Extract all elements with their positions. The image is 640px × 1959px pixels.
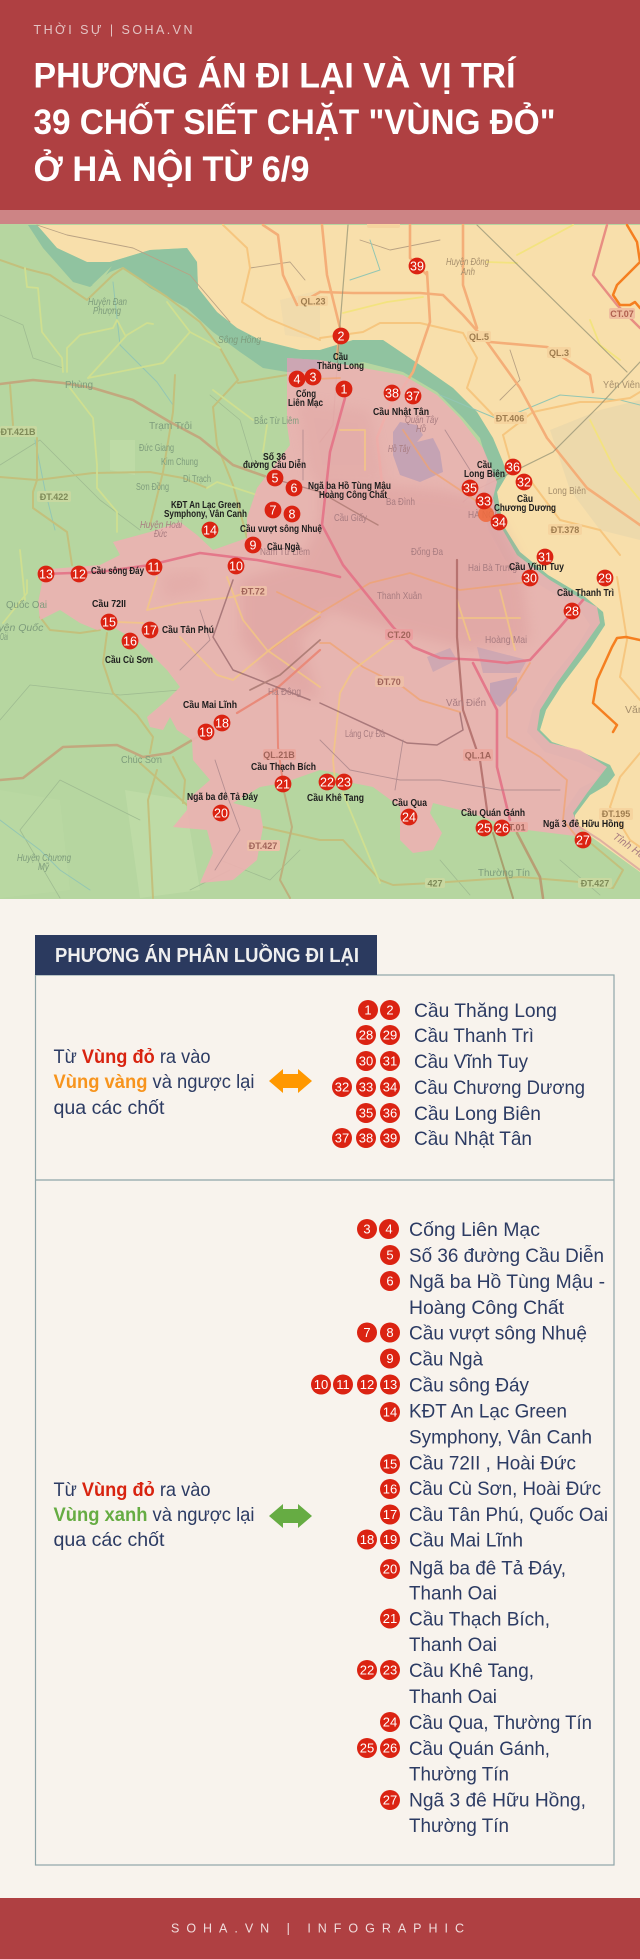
checkpoint name labels: Cống bbox=[296, 388, 316, 400]
row: Cầu Ngà bbox=[380, 1348, 483, 1370]
place names: Đức bbox=[154, 528, 167, 540]
checkpoint markers: 31 bbox=[538, 550, 552, 564]
row: Cầu Long Biên: 35 bbox=[359, 1106, 373, 1120]
row: Cầu Thanh Trì: 29 bbox=[383, 1028, 397, 1042]
checkpoint name labels: Số 36 bbox=[263, 451, 286, 463]
row: Cầu Tân Phú: Cầu Tân Phú, Quốc Oai bbox=[409, 1504, 608, 1526]
row: Cầu Chương Dương: 34 bbox=[383, 1080, 397, 1094]
row: Cầu vượt sông Nhuệ: 7 bbox=[363, 1325, 371, 1340]
row: Cầu sông Đáy: 12 bbox=[360, 1377, 374, 1392]
road number plates: QL.21B bbox=[263, 750, 295, 760]
checkpoint name labels: Cầu Quán Gánh bbox=[461, 807, 525, 819]
yellow zone description: qua các chốt bbox=[54, 1097, 165, 1119]
row: Cầu Thanh Trì: Cầu Thanh Trì bbox=[414, 1025, 534, 1047]
row: Cầu Thanh Trì: 28 bbox=[359, 1028, 373, 1042]
row: Cầu Vĩnh Tuy bbox=[356, 1051, 528, 1073]
row: Cầu Ngà: 9 bbox=[386, 1351, 394, 1366]
row: Ngã ba đê Tả Đáy: 20 bbox=[383, 1562, 397, 1576]
title: 39 CHỐT SIẾT CHẶT "VÙNG ĐỎ" bbox=[34, 102, 556, 142]
checkpoint markers: 35 bbox=[463, 482, 477, 496]
place names: Chúc Sơn bbox=[121, 754, 162, 766]
row: Ngã 3 đê Hữu Hồng: 27 bbox=[383, 1792, 397, 1808]
checkpoint markers: 29 bbox=[598, 572, 612, 586]
yellow zone bbox=[37, 225, 640, 872]
checkpoint markers: 33 bbox=[477, 494, 491, 508]
road number plates: ĐT.378 bbox=[551, 525, 579, 535]
checkpoint markers: 19 bbox=[199, 726, 213, 740]
place names: Ba Đình bbox=[386, 496, 415, 508]
light green roads bbox=[3, 268, 380, 883]
road number plates: ĐT.406 bbox=[496, 414, 524, 424]
row: Cầu Thạch Bích: Cầu Thạch Bích, bbox=[409, 1608, 550, 1630]
place names: Hai Bà Trưng bbox=[468, 562, 517, 574]
place names: Đức Giang bbox=[139, 442, 174, 454]
place names: Hồ bbox=[416, 423, 426, 435]
row: Cầu Thăng Long: 1 bbox=[364, 1002, 372, 1018]
checkpoint markers: 32 bbox=[517, 476, 531, 490]
red zone roads bbox=[270, 378, 577, 837]
row: Cầu Ngà: Cầu Ngà bbox=[409, 1348, 483, 1370]
checkpoint name labels: Cầu Qua bbox=[392, 797, 427, 809]
row: Cầu Vĩnh Tuy: 30 bbox=[359, 1054, 373, 1068]
place names: HÀ NỘI bbox=[468, 508, 497, 521]
checkpoint list: yellow zone bbox=[332, 1000, 585, 1150]
row: Cầu Long Biên bbox=[356, 1103, 541, 1125]
title bbox=[34, 56, 556, 189]
footer: SOHA.VN | INFOGRAPHIC bbox=[171, 1922, 464, 1936]
checkpoint markers: 23 bbox=[337, 776, 351, 790]
row: Cầu Mai Lĩnh: 18 bbox=[360, 1532, 374, 1547]
checkpoint markers: 16 bbox=[123, 634, 137, 648]
road number plates: CT.20 bbox=[387, 630, 411, 640]
row: Cầu sông Đáy bbox=[311, 1374, 529, 1396]
row: Cầu Khê Tang: Cầu Khê Tang, bbox=[409, 1660, 534, 1682]
row: Cầu Khê Tang: Thanh Oai bbox=[409, 1686, 497, 1708]
Red River bbox=[28, 225, 615, 825]
row: Cầu sông Đáy: 11 bbox=[336, 1377, 350, 1392]
road number plates: ĐT.427 bbox=[249, 841, 277, 851]
checkpoint name labels: Cầu bbox=[333, 351, 348, 363]
place names: Thường Tín bbox=[478, 867, 530, 879]
row: Cầu Cù Sơn: 16 bbox=[383, 1482, 397, 1496]
road number plates: QL.23 bbox=[300, 296, 326, 306]
row: Cầu Chương Dương: Cầu Chương Dương bbox=[414, 1077, 585, 1099]
yellow zone secondary roads bbox=[223, 225, 640, 847]
road number plates: ĐT.72 bbox=[241, 586, 265, 596]
river island bbox=[92, 266, 112, 285]
row: Số 36 đường Cầu Diễn: Số 36 đường Cầu Diễn bbox=[409, 1244, 604, 1267]
checkpoint markers: 9 bbox=[250, 538, 257, 552]
row: Ngã ba đê Tả Đáy bbox=[380, 1558, 566, 1604]
checkpoint markers: 6 bbox=[291, 482, 298, 496]
road number plates: ĐT.427 bbox=[581, 878, 609, 888]
green zone base bbox=[0, 224, 640, 899]
place names: Láng Cự Đà bbox=[345, 728, 385, 740]
Long Bien urban patch bbox=[550, 400, 640, 540]
row: Ngã ba Hồ Tùng Mậu: Ngã ba Hồ Tùng Mậu - bbox=[409, 1271, 605, 1293]
yellow zone description: Từ Vùng đỏ ra vào bbox=[54, 1046, 211, 1068]
checkpoint name labels: Cầu Vĩnh Tuy bbox=[509, 561, 564, 573]
checkpoint name labels: Cầu Ngà bbox=[267, 541, 300, 553]
row: Cầu Thạch Bích bbox=[380, 1608, 550, 1656]
tan highway west bbox=[0, 380, 543, 898]
road number plates: ĐT.195 bbox=[602, 809, 630, 819]
row: Cầu Cù Sơn: Cầu Cù Sơn, Hoài Đức bbox=[409, 1478, 601, 1500]
checkpoint name labels bbox=[91, 351, 624, 830]
checkpoint markers: 14 bbox=[203, 524, 217, 538]
place names: Mỹ bbox=[38, 861, 50, 873]
road number plates: QL.5 bbox=[469, 332, 489, 342]
thin streams bbox=[0, 240, 640, 890]
place names: Quận Tây bbox=[405, 414, 439, 426]
checkpoint markers: 27 bbox=[576, 834, 590, 848]
row: Cầu Quán Gánh: 25 bbox=[360, 1740, 374, 1756]
place names: Hồ Tây bbox=[388, 443, 410, 455]
road number plates: ĐT.422 bbox=[40, 492, 68, 502]
checkpoint markers: 17 bbox=[143, 624, 157, 638]
lakes bbox=[287, 358, 527, 707]
checkpoint list: green zone bbox=[311, 1219, 608, 1837]
checkpoint markers: 8 bbox=[289, 508, 296, 522]
row: Ngã ba đê Tả Đáy: Ngã ba đê Tả Đáy, bbox=[409, 1558, 566, 1580]
checkpoint name labels: đường Cầu Diễn bbox=[243, 458, 306, 471]
row: Cầu Khê Tang: 23 bbox=[383, 1662, 397, 1678]
row: Cầu vượt sông Nhuệ: Cầu vượt sông Nhuệ bbox=[409, 1322, 587, 1344]
road number plates: ĐT.421B bbox=[0, 427, 36, 437]
orange double arrow bbox=[269, 1069, 312, 1093]
green double arrow bbox=[269, 1504, 312, 1528]
row: Ngã ba Hồ Tùng Mậu bbox=[380, 1271, 605, 1319]
checkpoint markers: 3 bbox=[310, 370, 317, 384]
row: Ngã 3 đê Hữu Hồng: Thường Tín bbox=[409, 1815, 509, 1837]
row: Cầu Qua: Cầu Qua, Thường Tín bbox=[409, 1712, 592, 1734]
checkpoint markers: 39 bbox=[410, 260, 424, 274]
checkpoint name labels: Hoàng Công Chất bbox=[319, 489, 388, 501]
place names: Nam Từ Liêm bbox=[260, 546, 310, 558]
row: Cầu Thăng Long: Cầu Thăng Long bbox=[414, 1000, 557, 1022]
checkpoint name labels: Chương Dương bbox=[494, 503, 556, 514]
checkpoint markers bbox=[38, 258, 613, 848]
row: KĐT An Lạc Green: Symphony, Vân Canh bbox=[409, 1426, 592, 1448]
row: Cầu Mai Lĩnh: Cầu Mai Lĩnh bbox=[409, 1530, 523, 1552]
checkpoint name labels: Thăng Long bbox=[317, 361, 364, 372]
row: Cầu Nhật Tân: 37 bbox=[335, 1130, 349, 1146]
row: Cầu Quán Gánh: Thường Tín bbox=[409, 1764, 509, 1786]
row: Cầu vượt sông Nhuệ: 8 bbox=[386, 1325, 394, 1340]
place names: Kim Chung bbox=[161, 456, 198, 468]
place names: Huyện Chương bbox=[17, 852, 71, 864]
green zone description: Vùng xanh và ngược lại bbox=[54, 1504, 254, 1526]
checkpoint name labels: Cầu Nhật Tân bbox=[373, 406, 429, 418]
row: Cầu Long Biên: Cầu Long Biên bbox=[414, 1103, 541, 1125]
checkpoint name labels: KĐT An Lạc Green bbox=[171, 500, 241, 511]
checkpoint name labels: Cầu Tân Phú bbox=[162, 624, 214, 636]
row: Cầu Vĩnh Tuy: Cầu Vĩnh Tuy bbox=[414, 1051, 528, 1073]
section heading bbox=[35, 935, 377, 975]
minor roads bbox=[0, 315, 600, 898]
orange main roads north bbox=[263, 225, 640, 525]
place names: Huyện Đan bbox=[88, 296, 127, 308]
place names: Huyện Đông bbox=[446, 256, 489, 268]
checkpoint markers: 28 bbox=[565, 604, 579, 618]
checkpoint markers: 5 bbox=[272, 472, 279, 486]
checkpoint name labels: Symphony, Vân Canh bbox=[164, 509, 247, 520]
checkpoint markers: 2 bbox=[338, 330, 345, 344]
section panel outline bbox=[36, 975, 614, 1865]
railways bbox=[336, 224, 640, 480]
row: Cầu Long Biên: 36 bbox=[383, 1106, 397, 1120]
place names: Trạm Trôi bbox=[149, 420, 192, 432]
place names: Hoàng Mai bbox=[485, 634, 527, 646]
row: Cầu Thanh Trì bbox=[356, 1025, 534, 1047]
checkpoint name labels: Cầu 72II bbox=[92, 598, 126, 610]
checkpoint markers: 12 bbox=[72, 568, 86, 582]
north urban tint bbox=[295, 400, 385, 480]
checkpoint markers: 22 bbox=[320, 776, 334, 790]
checkpoint markers: 10 bbox=[229, 560, 243, 574]
place names bbox=[0, 256, 640, 881]
place names: Di Trạch bbox=[183, 473, 211, 485]
yellow zone description: Vùng vàng và ngược lại bbox=[54, 1071, 254, 1093]
road number plates: QL.3 bbox=[549, 348, 569, 358]
place names: Anh bbox=[460, 266, 475, 278]
row: Cầu Nhật Tân: Cầu Nhật Tân bbox=[414, 1128, 532, 1150]
row: Cầu Khê Tang bbox=[357, 1660, 534, 1708]
row: Cầu Vĩnh Tuy: 31 bbox=[383, 1054, 397, 1068]
row: Cầu Thăng Long: 2 bbox=[386, 1002, 394, 1018]
green zone description bbox=[54, 1479, 254, 1551]
row: Ngã ba Hồ Tùng Mậu: Hoàng Công Chất bbox=[409, 1297, 565, 1319]
checkpoint markers: 1 bbox=[341, 382, 348, 396]
checkpoint name labels: Ngã 3 đê Hữu Hồng bbox=[543, 818, 624, 830]
checkpoint markers: 30 bbox=[523, 572, 537, 586]
row: Cống Liên Mạc: 4 bbox=[385, 1222, 393, 1236]
checkpoint name labels: Cầu Mai Lĩnh bbox=[183, 699, 237, 711]
row: Cầu Mai Lĩnh: 19 bbox=[383, 1532, 397, 1547]
checkpoint markers: 21 bbox=[276, 778, 290, 792]
checkpoint markers: 20 bbox=[214, 806, 228, 820]
place names: Sơn Đồng bbox=[136, 481, 169, 493]
row: Cầu Nhật Tân bbox=[332, 1128, 532, 1150]
checkpoint markers: 34 bbox=[492, 516, 506, 530]
row: Cống Liên Mạc: Cống Liên Mạc bbox=[409, 1219, 540, 1241]
row: Cầu Nhật Tân: 39 bbox=[383, 1130, 397, 1146]
row: Ngã 3 đê Hữu Hồng bbox=[380, 1790, 586, 1837]
row: Cầu Quán Gánh: Cầu Quán Gánh, bbox=[409, 1738, 550, 1760]
row: Cống Liên Mạc: 3 bbox=[363, 1222, 371, 1236]
row: Số 36 đường Cầu Diễn: 5 bbox=[386, 1248, 394, 1262]
checkpoint markers: 13 bbox=[39, 568, 53, 582]
row: Cầu sông Đáy: 10 bbox=[314, 1377, 328, 1392]
row: Cầu Chương Dương bbox=[332, 1077, 585, 1099]
place names: Sông Hồng bbox=[218, 334, 261, 346]
row: Cầu sông Đáy: 13 bbox=[383, 1377, 397, 1392]
row: Ngã ba Hồ Tùng Mậu: 6 bbox=[386, 1274, 394, 1288]
map of Hanoi checkpoints bbox=[0, 220, 640, 899]
levee and olive roads bbox=[0, 260, 623, 898]
place names: Long Biên bbox=[548, 485, 586, 497]
red zone bbox=[37, 358, 607, 883]
checkpoint markers: 18 bbox=[215, 716, 229, 730]
yellow zone description bbox=[54, 1046, 254, 1119]
checkpoint name labels: Cầu Cù Sơn bbox=[105, 654, 153, 666]
green zone description: Từ Vùng đỏ ra vào bbox=[54, 1479, 211, 1501]
checkpoint name labels: Cầu bbox=[477, 459, 492, 471]
row: Cầu 72II: Cầu 72II , Hoài Đức bbox=[409, 1452, 576, 1474]
checkpoint markers: 37 bbox=[406, 390, 420, 404]
checkpoint name labels: Cầu Khê Tang bbox=[307, 792, 364, 804]
row: Cầu Quán Gánh: 26 bbox=[383, 1740, 397, 1756]
row: Cầu Nhật Tân: 38 bbox=[359, 1130, 373, 1146]
urban patch north bbox=[280, 290, 320, 340]
row: Ngã ba đê Tả Đáy: Thanh Oai bbox=[409, 1582, 497, 1604]
place names: Phùng bbox=[65, 379, 93, 391]
green zone description: qua các chốt bbox=[54, 1529, 165, 1551]
checkpoint markers: 4 bbox=[294, 372, 301, 386]
place names: Quốc Oai bbox=[6, 599, 47, 611]
green field patches bbox=[0, 440, 200, 898]
checkpoint markers: 38 bbox=[385, 386, 399, 400]
place names: Văn Điển bbox=[446, 697, 486, 709]
checkpoint name labels: Cầu Thanh Trì bbox=[557, 587, 614, 599]
road number plates: CT.07 bbox=[610, 309, 634, 319]
checkpoint markers: 25 bbox=[477, 822, 491, 836]
province border bbox=[593, 225, 640, 732]
row: Cầu Thạch Bích: Thanh Oai bbox=[409, 1634, 497, 1656]
place names: Cầu Giấy bbox=[334, 512, 368, 524]
road number plates: T.01 bbox=[508, 822, 526, 832]
road number plates bbox=[0, 220, 635, 888]
checkpoint markers: 36 bbox=[506, 460, 520, 474]
row: Cầu Khê Tang: 22 bbox=[360, 1662, 374, 1678]
row: Cầu sông Đáy: Cầu sông Đáy bbox=[409, 1374, 529, 1396]
checkpoint name labels: Ngã ba Hồ Tùng Mậu bbox=[308, 480, 391, 492]
place names: Bắc Từ Liêm bbox=[254, 414, 299, 427]
checkpoint name labels: Cầu sông Đáy bbox=[91, 565, 144, 577]
checkpoint markers: 11 bbox=[148, 560, 161, 574]
row: KĐT An Lạc Green: KĐT An Lạc Green bbox=[409, 1400, 567, 1422]
dense urban tint bbox=[240, 480, 530, 700]
row: Ngã 3 đê Hữu Hồng: Ngã 3 đê Hữu Hồng, bbox=[409, 1790, 586, 1812]
row: Cầu Chương Dương: 33 bbox=[359, 1080, 373, 1094]
checkpoint name labels: Long Biên bbox=[464, 469, 505, 480]
title: Ở HÀ NỘI TỪ 6/9 bbox=[34, 149, 310, 189]
row: Cầu Tân Phú: 17 bbox=[383, 1507, 397, 1522]
Hanoi center dot bbox=[478, 506, 494, 522]
place names: Oai bbox=[0, 631, 8, 643]
road number plates: QL.1A bbox=[465, 750, 492, 760]
checkpoint name labels: Liên Mạc bbox=[288, 398, 323, 409]
row: Cầu Chương Dương: 32 bbox=[335, 1080, 349, 1094]
place names: Hà Đông bbox=[268, 686, 301, 698]
place names: Huyện Hoài bbox=[140, 519, 183, 531]
row: Cầu Quán Gánh bbox=[357, 1738, 550, 1786]
title: PHƯƠNG ÁN ĐI LẠI VÀ VỊ TRÍ bbox=[34, 56, 517, 96]
checkpoint name labels: Cầu vượt sông Nhuệ bbox=[240, 523, 322, 535]
place names: Đống Đa bbox=[411, 546, 443, 558]
footer bbox=[0, 1898, 640, 1959]
checkpoint markers: 7 bbox=[270, 504, 277, 518]
row: Cầu Qua: 24 bbox=[383, 1714, 397, 1730]
road number plates: ĐT.70 bbox=[377, 677, 401, 687]
section heading: PHƯƠNG ÁN PHÂN LUỒNG ĐI LẠI bbox=[55, 943, 359, 967]
kicker text: THỜI SỰ | SOHA.VN bbox=[34, 22, 192, 37]
row: Cầu Mai Lĩnh bbox=[357, 1530, 523, 1552]
place names: Phượng bbox=[93, 305, 121, 317]
checkpoint markers: 15 bbox=[102, 616, 116, 630]
row: Cầu 72II: 15 bbox=[383, 1456, 397, 1472]
row: Cầu Thạch Bích: 21 bbox=[383, 1611, 397, 1626]
checkpoint markers: 24 bbox=[402, 810, 416, 824]
row: KĐT An Lạc Green bbox=[380, 1400, 592, 1448]
row: KĐT An Lạc Green: 14 bbox=[383, 1404, 397, 1420]
road number plates: 427 bbox=[427, 878, 443, 888]
expressway northeast bbox=[593, 225, 640, 328]
western urban tint bbox=[160, 570, 205, 600]
checkpoint name labels: Ngã ba đê Tả Đáy bbox=[187, 792, 258, 803]
checkpoint name labels: Cầu Thạch Bích bbox=[251, 761, 316, 773]
checkpoint name labels: Cầu bbox=[517, 493, 533, 505]
header banner bbox=[0, 0, 640, 225]
checkpoint markers: 26 bbox=[495, 822, 509, 836]
place names: Thanh Xuân bbox=[377, 590, 422, 602]
